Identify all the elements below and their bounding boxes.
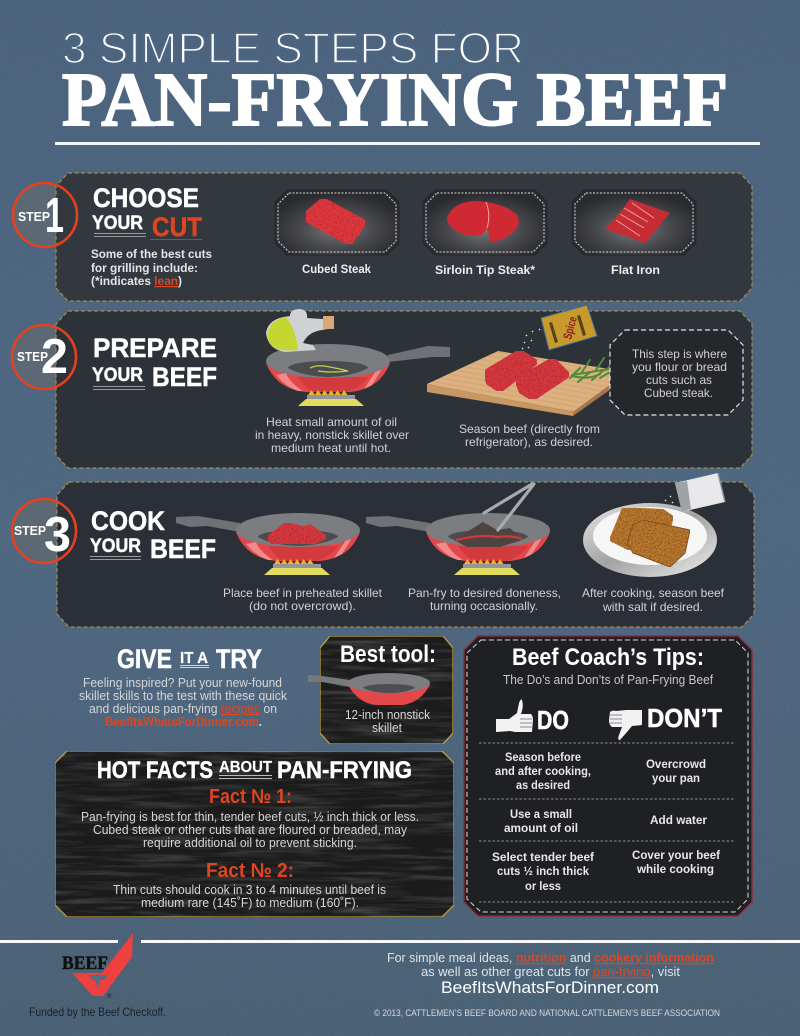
callout: flour or bread: Cubed steak. (644, 386, 713, 400)
logo: beef checkoff (29, 933, 166, 1019)
column: do tips: Season before (505, 750, 581, 764)
text: after cooking (582, 586, 725, 614)
text: try body (79, 676, 288, 729)
panel: best tool: Best tool: (340, 641, 436, 668)
text: fact 2: Fact № 2: (206, 860, 294, 882)
heading: choose your cut: YOUR (92, 213, 143, 234)
text: place beef (223, 586, 383, 613)
text: best cuts intro: (*indicates lean) (91, 274, 182, 288)
panel: hot facts (55, 751, 454, 917)
meat tile: flat iron: Flat Iron (611, 263, 660, 277)
meat tile: sirloin tip steak: Sirloin Tip Steak* (435, 263, 535, 277)
text: try body: and delicious pan-frying recipes on (89, 702, 277, 716)
step badge 3 backing (12, 499, 76, 563)
text: place beef: Place beef in preheated skillet (223, 586, 383, 600)
heading: give it a try (117, 644, 262, 674)
text: try body: BeefItsWhatsForDinner.com. (105, 715, 262, 729)
panel: step 2 prepare your beef (12, 305, 752, 468)
step 2 badge: STEP (17, 350, 48, 364)
footer text: BeefItsWhatsForDinner.com (441, 978, 659, 997)
step 2 badge: 2 (41, 330, 68, 384)
text: after cooking: with salt if desired. (602, 600, 703, 614)
text: pan-fry (408, 586, 561, 613)
label: don't: DON’T (647, 703, 722, 733)
heading: hot facts about pan-frying: HOT FACTS (97, 757, 213, 784)
column: don't tips: your pan (652, 771, 700, 785)
meat tile: cubed steak (275, 190, 399, 276)
heading: prepare your beef: YOUR (92, 365, 143, 386)
text: fact 1: Pan-frying is best for thin, tender beef cuts, ½ inch thick or less. (81, 809, 419, 824)
icon: oil bottle (266, 309, 334, 352)
heading: hot facts about pan-frying (97, 757, 412, 784)
heading: hot facts about pan-frying: ABOUT (219, 759, 272, 776)
logo: beef checkoff: Funded by the Beef Checkoff. (29, 1005, 166, 1019)
column: do tips (492, 750, 595, 893)
text: heat oil: medium heat until hot. (271, 441, 391, 455)
column: don't tips: while cooking (636, 862, 714, 876)
footer text (374, 951, 720, 1018)
icon: spice packet: Spice (560, 315, 580, 341)
text: try body: Feeling inspired? Put your new-found (83, 676, 282, 690)
heading: choose your cut: CHOOSE (93, 183, 199, 213)
text: after cooking: After cooking, season beef (582, 586, 725, 600)
salt sprinkle (522, 329, 540, 349)
meat tile: cubed steak: Cubed Steak (302, 262, 371, 276)
meat tile: sirloin tip steak (423, 190, 547, 277)
panel: step 3 cook your beef (12, 473, 754, 627)
text: fact 1 (81, 786, 419, 850)
text: try body: skillet skills to the test with these quick (79, 689, 288, 703)
title: 3 SIMPLE STEPS FOR (62, 24, 524, 73)
text: fact 2: Thin cuts should cook in 3 to 4 minutes until beef is (113, 882, 386, 897)
heading: tips title: The Do’s and Don’ts of Pan-Frying Beef (503, 672, 713, 687)
panel: best tool: skillet (372, 721, 402, 735)
text: pan-fry: turning occasionally. (430, 599, 538, 613)
callout: flour or bread: cuts such as (646, 373, 712, 387)
column: don't tips: Cover your beef (632, 848, 721, 862)
column: don't tips (632, 757, 721, 876)
column: do tips: as desired (516, 778, 570, 792)
logo: beef checkoff: BEEF (62, 953, 108, 974)
text: heat oil: Heat small amount of oil (266, 415, 397, 429)
label: do: DO (537, 705, 569, 735)
text: fact 1: Fact № 1: (209, 786, 292, 808)
step 3 badge: 3 (44, 508, 71, 562)
column: do tips: amount of oil (504, 821, 578, 835)
heading: choose your cut (92, 183, 202, 242)
text: season beef: Season beef (directly from (459, 422, 600, 436)
step badge 2 backing (12, 325, 76, 389)
illustration: pan with oil (266, 344, 450, 406)
text: best cuts intro: for grilling include: (91, 261, 198, 275)
callout: flour or bread: you flour or bread (632, 360, 727, 374)
text: heat oil: in heavy, nonstick skillet over (255, 428, 409, 442)
footer text: For simple meal ideas, nutrition and cookery information (387, 951, 714, 965)
heading: cook your beef: YOUR (90, 536, 141, 557)
text: season beef (459, 422, 600, 449)
step 1 badge: STEP (18, 210, 50, 224)
panel: best tool: 12-inch nonstick (345, 708, 431, 722)
column: do tips: cuts ½ inch thick (497, 864, 589, 878)
column: don't tips: Add water (650, 813, 707, 827)
illustration: pan with raw beef (176, 513, 360, 575)
text: fact 2 (113, 860, 386, 910)
heading: tips title (503, 644, 713, 687)
illustration: plate with cooked steak (583, 503, 717, 577)
column: do tips: Use a small (510, 807, 572, 821)
text: place beef: (do not overcrowd). (249, 599, 356, 613)
column: do tips: and after cooking, (495, 764, 591, 778)
heading: prepare your beef (92, 333, 217, 392)
text: best cuts intro: Some of the best cuts (91, 247, 212, 261)
step 1 badge: 1 (45, 189, 64, 243)
step 3 badge (12, 499, 76, 563)
icon: spice packet (541, 305, 597, 350)
column: do tips: or less (525, 879, 561, 893)
heading: give it a try: TRY (216, 644, 262, 674)
text: heat oil (255, 415, 409, 455)
heading: give it a try: IT A (180, 650, 208, 667)
heading: give it a try: GIVE (117, 644, 172, 674)
logo: beef checkoff: ® (107, 993, 112, 1000)
panel: step 1 choose your cut (13, 173, 752, 301)
step 2 badge (12, 325, 76, 389)
text: fact 1: Cubed steak or other cuts that are floured or breaded, may (93, 822, 407, 837)
icon: skillet (308, 673, 430, 705)
heading: hot facts about pan-frying: PAN-FRYING (277, 757, 412, 784)
column: don't tips: Overcrowd (646, 757, 706, 771)
title: PAN-FRYING BEEF (62, 58, 728, 142)
text: fact 1: require additional oil to prevent sticking. (143, 835, 357, 850)
illustration: pan with browning beef and tongs (366, 484, 550, 575)
step badge 1 backing (13, 183, 77, 247)
heading: cook your beef: COOK (91, 506, 165, 536)
heading: tips title: Beef Coach’s Tips: (512, 644, 704, 671)
heading: choose your cut: CUT (152, 212, 202, 242)
step 1 badge (13, 183, 77, 247)
footer text: © 2013, CATTLEMEN’S BEEF BOARD AND NATIONAL CATTLEMEN’S BEEF ASSOCIATION (374, 1008, 720, 1018)
callout: flour or bread: This step is where (632, 347, 727, 361)
heading: cook your beef (90, 506, 216, 564)
icon: thumbs down (609, 710, 642, 740)
title (62, 24, 728, 142)
panel: best tool (308, 636, 453, 744)
heading: prepare your beef: BEEF (152, 362, 217, 392)
icon: salt shaker (665, 473, 725, 512)
heading: cook your beef: BEEF (150, 534, 216, 564)
column: do tips: Select tender beef (492, 850, 595, 864)
illustration: cutting board with beef (427, 351, 628, 416)
panel: beef coach's tips (464, 636, 752, 916)
icon: herbs (570, 358, 622, 382)
meat tile: flat iron (572, 190, 696, 277)
text: fact 2: medium rare (145˚F) to medium (160˚F). (141, 895, 359, 910)
footer text: as well as other great cuts for pan-frying, visit (421, 965, 681, 979)
section: give it a try (79, 644, 288, 729)
text: best cuts intro (91, 247, 212, 288)
text: pan-fry: Pan-fry to desired doneness, (408, 586, 561, 600)
text: season beef: refrigerator), as desired. (465, 435, 593, 449)
heading: prepare your beef: PREPARE (93, 333, 217, 363)
icon: thumbs up (496, 699, 533, 732)
callout: flour or bread (610, 330, 743, 415)
step 3 badge: STEP (14, 524, 46, 538)
dividers (479, 743, 735, 902)
